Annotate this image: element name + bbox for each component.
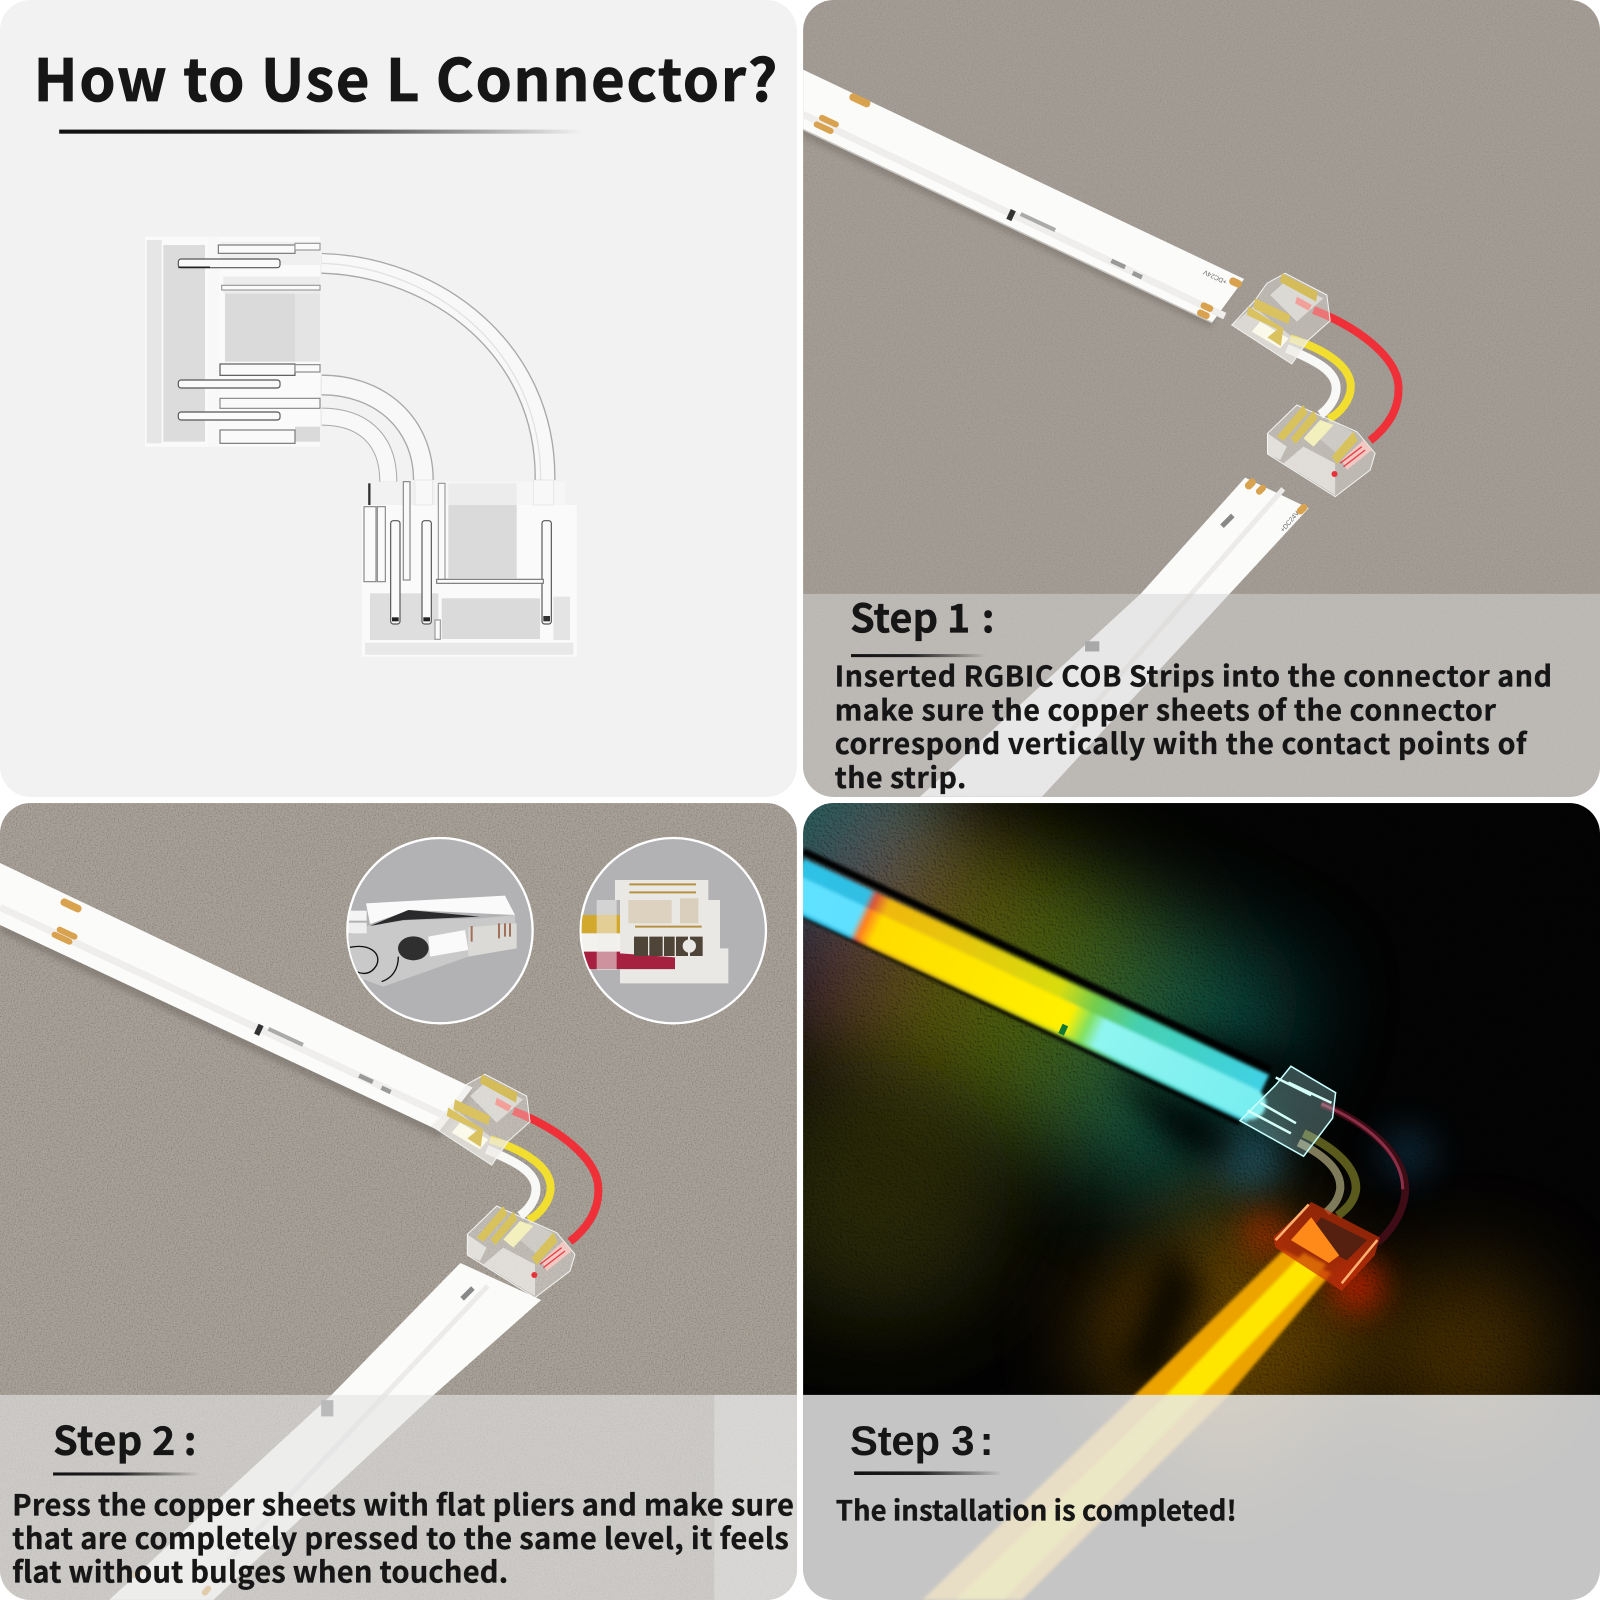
step 2 text: Press the copper sheets with flat pliers and make sure bbox=[12, 1482, 794, 1524]
strips and connector photo: +DC24V bbox=[1202, 268, 1228, 285]
step 1 heading: Step 1 bbox=[850, 588, 970, 645]
panel: step 3 bbox=[803, 803, 1600, 1600]
step 1 rule bbox=[851, 654, 986, 657]
caption band bbox=[803, 1395, 1600, 1600]
caption band bbox=[0, 1395, 797, 1600]
step 1 text: the strip. bbox=[835, 756, 966, 797]
step 1 text bbox=[835, 655, 1552, 797]
panel: step 1 bbox=[803, 0, 1600, 797]
step 2 heading: Step 2 bbox=[53, 1410, 176, 1467]
detail circle: pliers pressing connector bbox=[347, 838, 533, 1023]
strips and connector photo: +DC24V bbox=[1279, 510, 1301, 534]
step 1 heading bbox=[852, 602, 992, 642]
strips and connector photo bbox=[803, 70, 1309, 797]
step 3 text: The installation is completed! bbox=[836, 1488, 1237, 1528]
step 1 text: make sure the copper sheets of the connector bbox=[835, 688, 1496, 729]
strips bbox=[0, 863, 541, 1600]
connector photo: step 1 bbox=[1232, 273, 1399, 497]
connector photo: step 2 bbox=[432, 1074, 598, 1298]
detail circles bbox=[347, 838, 766, 1023]
panel: title and connector diagram bbox=[0, 0, 797, 797]
step 1 text: correspond vertically with the contact points of bbox=[835, 722, 1528, 763]
title underline bbox=[59, 130, 582, 134]
step 2 heading bbox=[54, 1424, 194, 1464]
connector diagram bbox=[145, 237, 577, 657]
step 1 heading: : bbox=[982, 588, 995, 645]
step 3 heading: : bbox=[980, 1417, 994, 1464]
glowing strip scene bbox=[732, 717, 1600, 1600]
step 3 heading: Step 3 bbox=[850, 1417, 974, 1464]
title: How to Use L Connector? bbox=[34, 34, 778, 118]
step 2 rule bbox=[53, 1472, 199, 1476]
step 2 heading: : bbox=[184, 1410, 197, 1467]
panel: step 2 bbox=[0, 803, 797, 1600]
step 3 rule bbox=[854, 1471, 1002, 1475]
step 2 text: that are completely pressed to the same level, it feels bbox=[12, 1516, 789, 1558]
step 1 text: Inserted RGBIC COB Strips into the connector and bbox=[835, 655, 1552, 696]
step 2 text: flat without bulges when touched. bbox=[12, 1550, 508, 1592]
step 2 text bbox=[12, 1492, 793, 1590]
caption band bbox=[803, 594, 1600, 797]
detail circle: pressed connector bbox=[581, 838, 766, 1023]
